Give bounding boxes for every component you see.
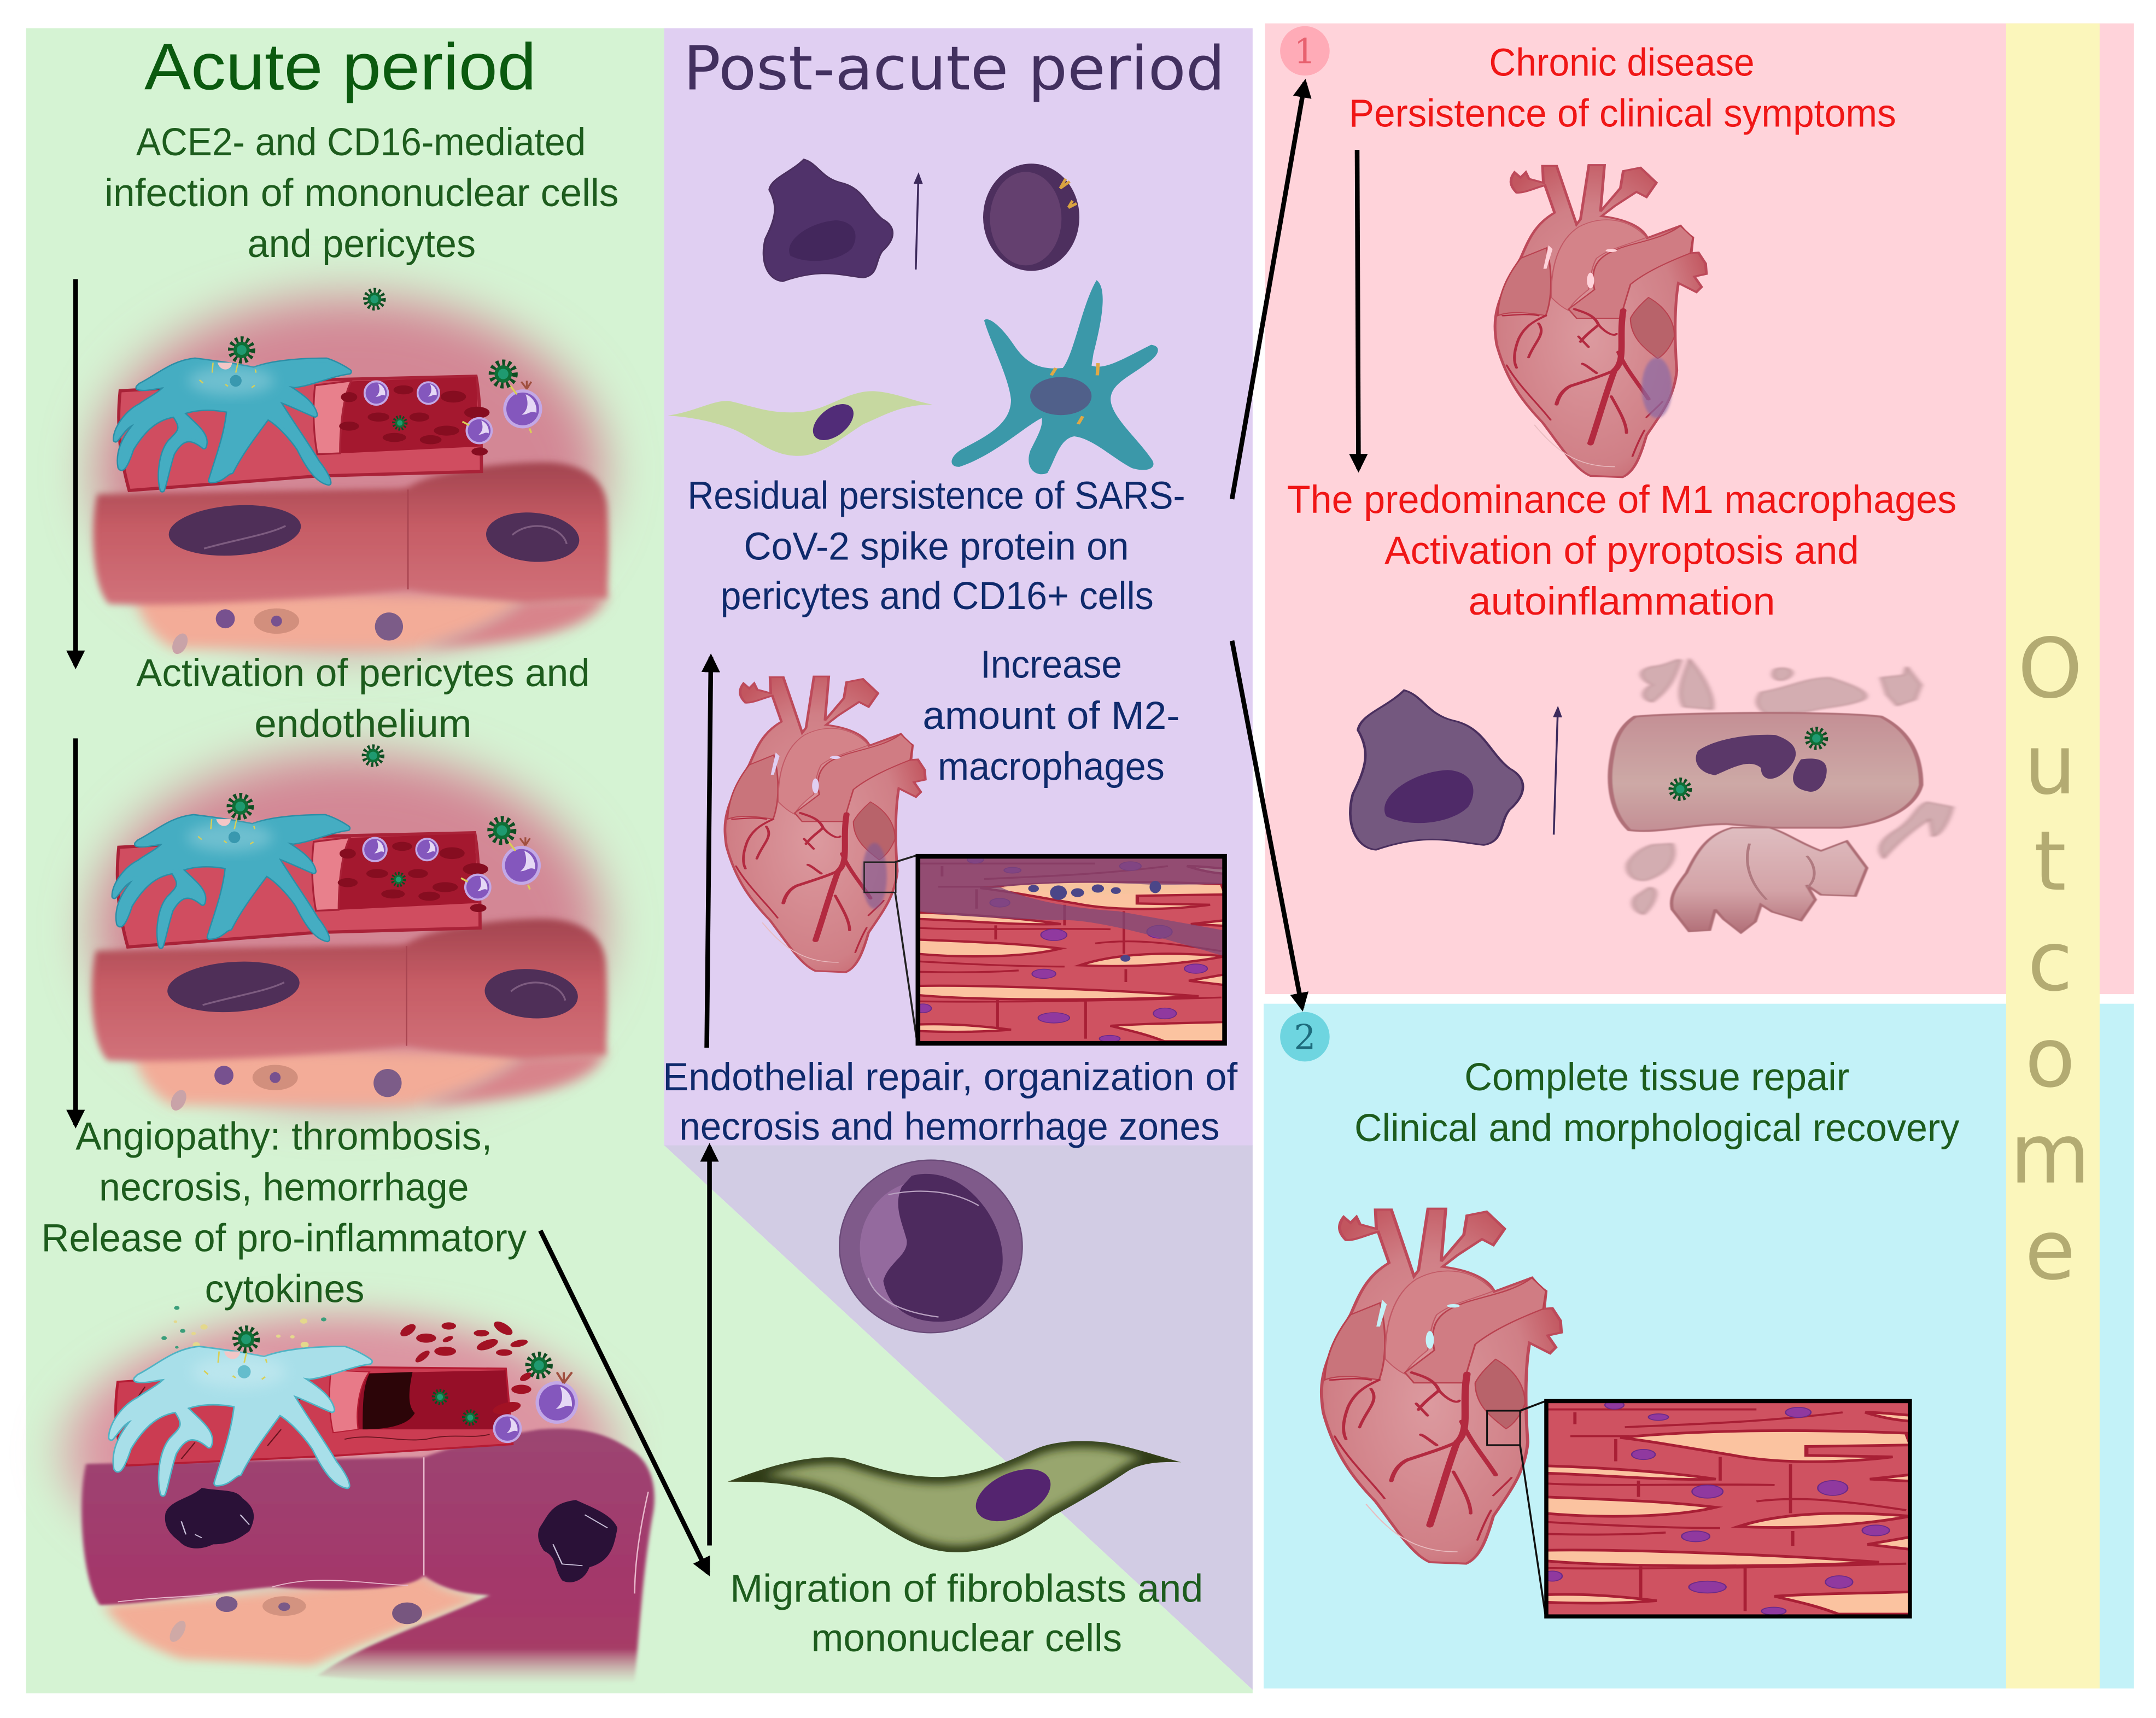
arrow: down, first step: [75, 279, 77, 665]
text: angiopathy and cytokines: [41, 1114, 527, 1311]
text: migration of fibroblasts: mononuclear cells: [811, 1616, 1122, 1660]
icon: fibroblast: [668, 391, 932, 456]
arrow: post-acute to chronic disease: [1232, 83, 1305, 499]
panel: acute period: [26, 28, 665, 1693]
icon: spike-bearing oval cell: [983, 163, 1079, 271]
text: chronic disease: [1349, 40, 1896, 135]
arrow: thin increase: [916, 174, 919, 270]
title: Acute period: Acute period: [144, 30, 536, 103]
title: Post-acute period: Post-acute period: [683, 33, 1225, 104]
text: M1 macrophages and pyroptosis: [1287, 478, 1956, 623]
icon: activated fibroblast: [728, 1441, 1181, 1552]
inset: myocardium with macrophage infiltrate: [914, 856, 1225, 1043]
badge: number 2: 2: [1294, 1018, 1316, 1057]
illustration: angiopathy with thrombosis, necrosis and hemorrhage: [68, 1306, 655, 1684]
arrow: fibroblasts up to endothelial repair: [709, 1147, 710, 1545]
text: residual spike persistence: Residual persistence of SARS-: [687, 474, 1185, 517]
label: Outcome vertical letters: u: [2024, 717, 2076, 813]
text: activation of pericytes: Activation of pericytes and: [136, 651, 590, 695]
text: chronic disease: Persistence of clinical symptoms: [1349, 91, 1896, 135]
icon: M2 macrophage: [763, 159, 892, 282]
text: migration of fibroblasts: Migration of fibroblasts and: [730, 1567, 1203, 1611]
text: ACE2 and CD16 infection: ACE2- and CD16-mediated: [136, 120, 586, 164]
text: angiopathy and cytokines: necrosis, hemorrhage: [99, 1165, 469, 1209]
badge: number 2: [1280, 1012, 1330, 1061]
icon: M1 macrophage: [1350, 690, 1523, 850]
text: ACE2 and CD16 infection: and pericytes: [248, 222, 476, 266]
text: increase M2 macrophages: amount of M2-: [922, 694, 1180, 738]
label: Outcome vertical letters: [2010, 621, 2090, 1299]
label: Outcome vertical letters: c: [2028, 914, 2073, 1010]
text: angiopathy and cytokines: cytokines: [205, 1267, 364, 1311]
arrow: thin increase: [1554, 708, 1558, 834]
text: endothelial repair: Endothelial repair, organization of: [663, 1055, 1238, 1099]
label: Outcome vertical letters: m: [2010, 1106, 2090, 1202]
text: tissue repair: [1354, 1055, 1960, 1150]
label: Outcome vertical letters: o: [2025, 1010, 2076, 1106]
text: angiopathy and cytokines: Angiopathy: thrombosis,: [75, 1114, 492, 1158]
label: Outcome vertical letters: e: [2025, 1202, 2076, 1299]
panel: post-acute period: [663, 28, 1253, 1693]
text: activation of pericytes: [136, 651, 590, 746]
arrow: release of cytokines to migration of fibroblasts: [540, 1231, 708, 1573]
text: angiopathy and cytokines: Release of pro-inflammatory: [41, 1216, 527, 1260]
text: tissue repair: Complete tissue repair: [1464, 1055, 1849, 1099]
panel: outcome 1 chronic disease: [1265, 24, 2134, 994]
arrow: endothelial repair up to residual persistence: [707, 657, 711, 1048]
illustration: heart with infiltrated zone: [725, 676, 925, 1042]
text: residual spike persistence: [687, 474, 1185, 618]
text: ACE2 and CD16 infection: [104, 120, 619, 266]
arrow: chronic disease down to M1 predominance: [1357, 150, 1358, 469]
badge: number 1: 1: [1294, 32, 1316, 72]
text: tissue repair: Clinical and morphological recovery: [1354, 1106, 1960, 1150]
illustration: activated pericyte and endothelium: [92, 747, 607, 1113]
text: ACE2 and CD16 infection: infection of mononuclear cells: [104, 171, 619, 215]
text: residual spike persistence: CoV-2 spike protein on: [744, 524, 1129, 568]
text: migration of fibroblasts: [730, 1567, 1203, 1660]
inset: healthy myocardium: [1542, 1401, 1911, 1616]
text: endothelial repair: necrosis and hemorrhage zones: [679, 1105, 1220, 1149]
text: M1 macrophages and pyroptosis: autoinflammation: [1469, 580, 1775, 623]
icon: pericyte with spike protein: [951, 280, 1158, 474]
text: increase M2 macrophages: Increase: [980, 643, 1122, 687]
text: residual spike persistence: pericytes and CD16+ cells: [721, 574, 1154, 618]
illustration: infected pericyte, vessel and cardiomyocytes: [94, 290, 609, 657]
label: Outcome vertical letters: t: [2034, 813, 2066, 909]
illustration: healthy heart: [1322, 1208, 1561, 1616]
arrow: down, second step: [75, 738, 77, 1125]
text: M1 macrophages and pyroptosis: The predominance of M1 macrophages: [1287, 478, 1956, 522]
label: Outcome vertical letters: O: [2018, 621, 2083, 717]
text: activation of pericytes: endothelium: [254, 702, 472, 746]
text: increase M2 macrophages: macrophages: [938, 745, 1165, 788]
icon: lymphocyte: [839, 1160, 1023, 1333]
badge: number 1: [1280, 26, 1330, 75]
illustration: pyroptotic cell: [1610, 659, 1953, 933]
text: chronic disease: Chronic disease: [1489, 40, 1755, 84]
panel: outcome 2 recovery: [1264, 1004, 2134, 1688]
text: endothelial repair: [663, 1055, 1238, 1149]
text: M1 macrophages and pyroptosis: Activation of pyroptosis and: [1384, 529, 1859, 572]
illustration: heart with lesion: [1495, 165, 1707, 477]
arrow: post-acute to recovery: [1232, 641, 1302, 1008]
panel: outcome strip: [2006, 24, 2100, 1688]
text: increase M2 macrophages: [922, 643, 1180, 788]
